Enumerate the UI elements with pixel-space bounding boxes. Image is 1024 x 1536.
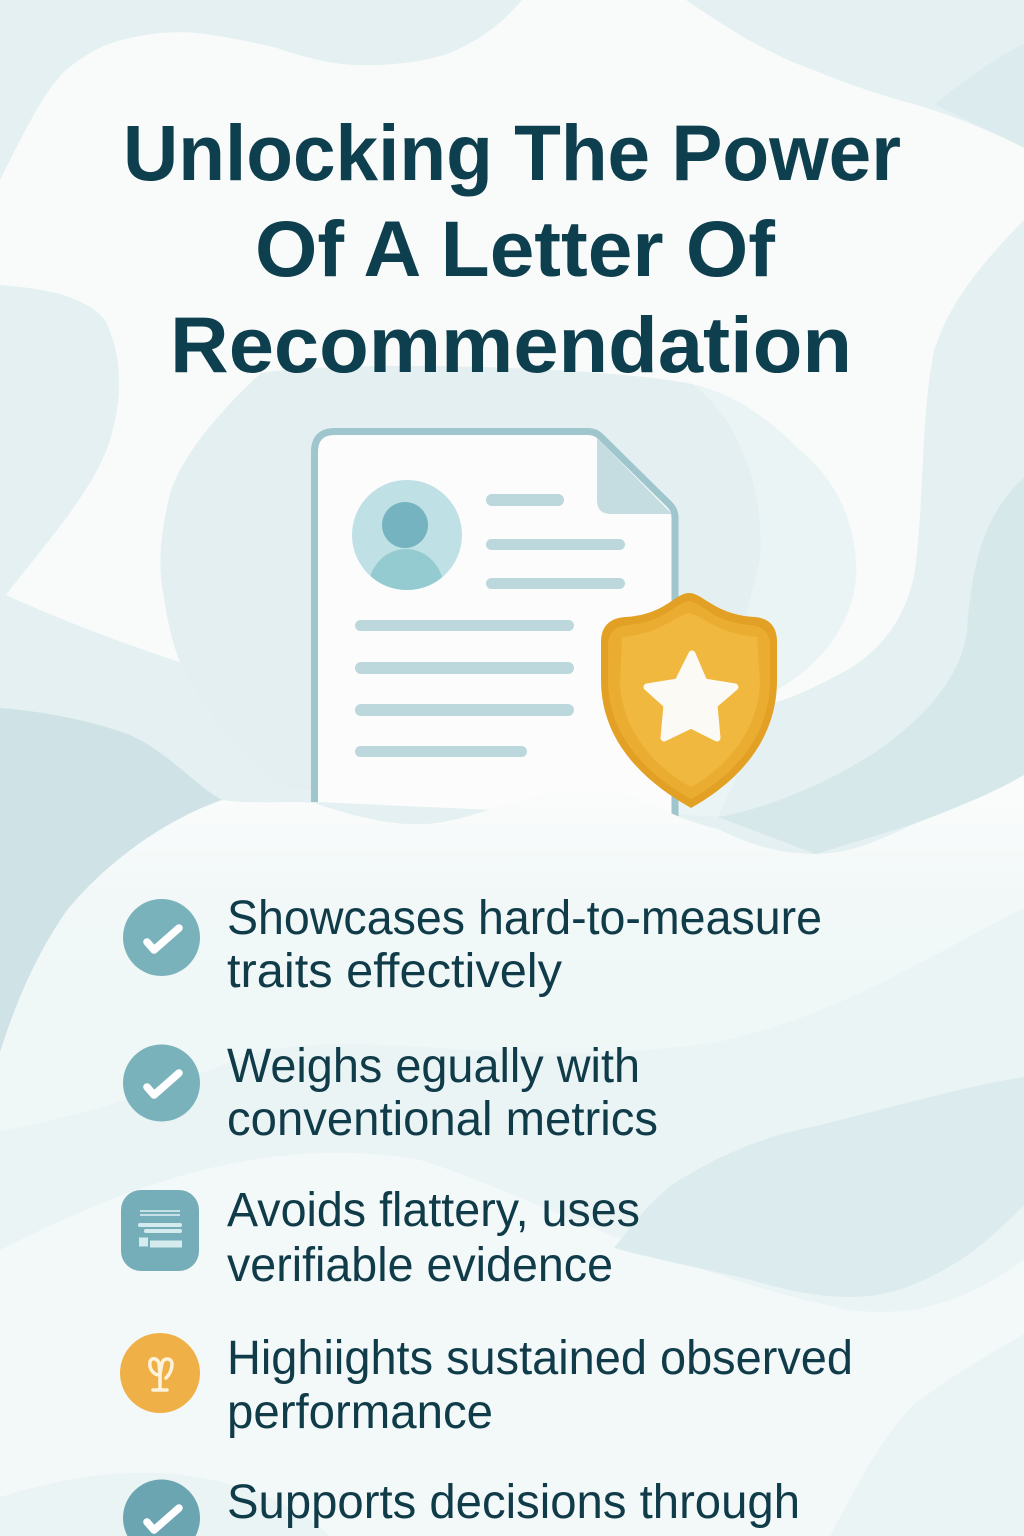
list item 1 — [123, 892, 822, 998]
icon: folded corner — [597, 438, 672, 514]
icon: check circle — [123, 1044, 200, 1122]
title: Of A Letter Of — [255, 204, 776, 293]
panel: document illustration — [314, 432, 675, 818]
list item 4 — [120, 1332, 853, 1439]
text: item 4: Highiights sustained observed — [227, 1332, 853, 1385]
text: item 2: Weighs egually with — [227, 1040, 640, 1093]
text lines on document — [355, 494, 625, 757]
icon: document lines badge — [121, 1190, 199, 1271]
title: Unlocking The Power — [123, 108, 901, 197]
text: item 1: Showcases hard-to-measure — [227, 892, 822, 945]
text: item 5: Supports decisions through — [227, 1476, 800, 1529]
icon: profile avatar — [352, 480, 462, 590]
text: item 1 — [227, 892, 822, 998]
text: item 4: performance — [227, 1386, 493, 1439]
icon: check circle — [123, 899, 200, 976]
icon: check circle — [123, 1480, 200, 1536]
list item 2 — [123, 1040, 658, 1146]
text: item 2 — [227, 1040, 658, 1146]
text: item 4 — [227, 1332, 853, 1439]
icon: shield with star — [601, 593, 777, 808]
list item 3 — [121, 1184, 640, 1292]
text: item 2: conventional metrics — [227, 1093, 658, 1146]
text: item 3: Avoids flattery, uses — [227, 1184, 640, 1237]
title — [123, 108, 901, 389]
title: Recommendation — [170, 300, 852, 389]
text: item 3: verifiable evidence — [227, 1239, 613, 1292]
list item 5 — [123, 1476, 800, 1536]
text: item 3 — [227, 1184, 640, 1292]
icon: sprout badge — [120, 1333, 200, 1413]
icon: document sheet — [314, 432, 675, 818]
text: item 1: traits effectively — [227, 945, 562, 998]
